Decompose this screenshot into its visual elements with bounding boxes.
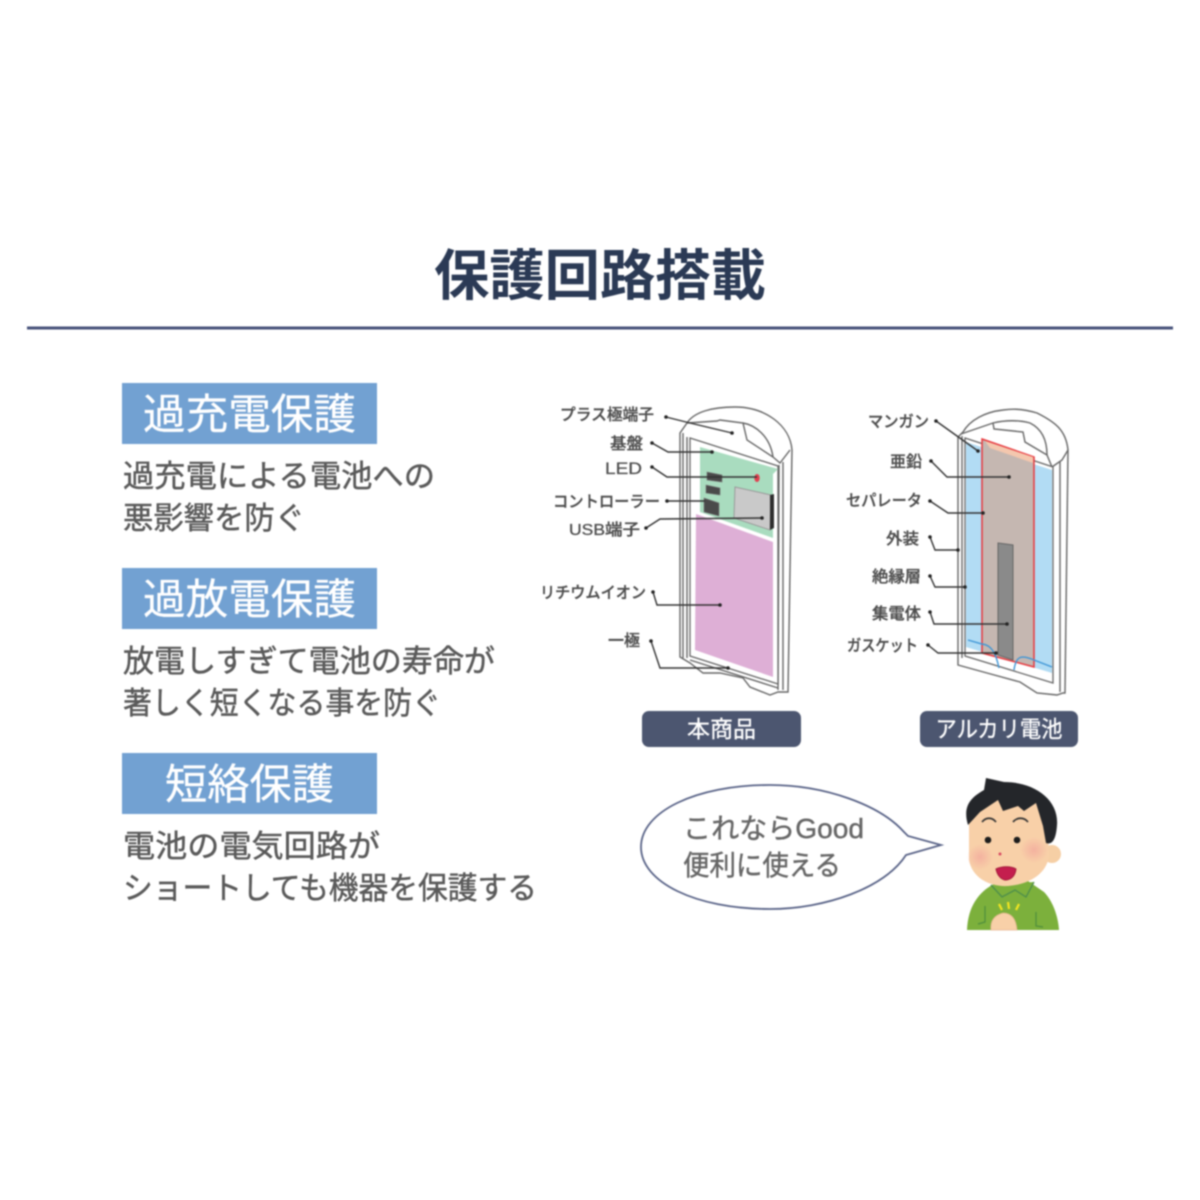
character: happy man — [966, 778, 1061, 930]
text: over-discharge description — [123, 644, 495, 721]
heading: over-discharge: 過放電保護 — [143, 576, 356, 623]
blue electrolyte layer — [966, 442, 1052, 673]
text: over-discharge description: 放電しすぎて電池の寿命が — [123, 644, 495, 679]
heading: short-circuit: 短絡保護 — [165, 761, 334, 808]
brows — [982, 818, 1028, 822]
callout labels: コントローラー — [553, 494, 660, 511]
callout lines — [644, 415, 764, 670]
ear — [1043, 845, 1061, 863]
bubble text: これならGood — [683, 813, 864, 844]
section: overcharge protection — [122, 383, 435, 536]
hair — [966, 778, 1057, 843]
battery casing — [958, 409, 1068, 695]
callout labels: 絶縁層 — [872, 568, 921, 586]
callout labels: セパレータ — [846, 492, 922, 510]
bubble text — [683, 813, 864, 881]
callout labels: プラス極端子 — [560, 406, 654, 424]
manganese top strip — [985, 441, 1033, 463]
nose — [998, 852, 1002, 856]
callout labels — [846, 413, 929, 655]
title divider — [27, 326, 1173, 330]
green circuit board — [700, 447, 778, 538]
badge: alkaline battery — [920, 711, 1078, 747]
callout labels: ガスケット — [847, 637, 918, 655]
heading: over-discharge — [122, 568, 377, 629]
section: short-circuit protection — [122, 753, 537, 906]
speech bubble — [641, 785, 941, 909]
text: short-circuit description: 電池の電気回路が — [123, 829, 380, 864]
heading: short-circuit — [122, 753, 377, 814]
badge: this product: 本商品 — [687, 716, 756, 742]
section: over-discharge protection — [122, 568, 495, 721]
hands — [991, 913, 1017, 930]
heading: overcharge: 過充電保護 — [143, 391, 356, 438]
callout labels: 亜鉛 — [890, 453, 922, 471]
text: overcharge description — [123, 459, 435, 536]
sparkle — [999, 902, 1019, 910]
face — [969, 794, 1049, 886]
battery casing — [680, 407, 792, 695]
text: overcharge description: 過充電による電池への — [123, 459, 435, 494]
title: 保護回路搭載 — [434, 245, 766, 307]
callout labels: 基盤 — [610, 435, 643, 453]
diagram: alkaline battery — [846, 409, 1078, 747]
callout labels: リチウムイオン — [540, 584, 646, 602]
controller chips — [704, 472, 722, 516]
callout labels: 一極 — [608, 632, 640, 650]
bubble text: 便利に使える — [683, 850, 841, 881]
USB terminal — [734, 487, 774, 530]
cheeks — [967, 844, 993, 870]
text: short-circuit description: ショートしても機器を保護する — [123, 871, 537, 906]
eyes — [985, 837, 991, 843]
badge: alkaline battery: アルカリ電池 — [936, 716, 1062, 742]
callout labels: LED — [605, 459, 642, 478]
zinc core — [982, 439, 1034, 667]
text: over-discharge description: 著しく短くなる事を防ぐ — [123, 686, 441, 721]
callout labels — [540, 406, 660, 650]
text: overcharge description: 悪影響を防ぐ — [123, 501, 305, 536]
callout labels: 集電体 — [872, 605, 921, 623]
collar — [991, 882, 1034, 897]
sweater — [967, 881, 1059, 930]
sleeve lines — [978, 906, 1043, 927]
gasket wave — [968, 640, 1052, 670]
heading: overcharge — [122, 383, 377, 444]
pink lithium-ion cell — [695, 514, 773, 677]
text: short-circuit description — [123, 829, 537, 906]
collector rod — [998, 543, 1013, 660]
callout labels: USB端子 — [569, 521, 640, 539]
badge: this product — [642, 711, 801, 747]
callout lines — [926, 419, 1011, 655]
diagram: product battery — [540, 406, 801, 747]
mouth — [996, 867, 1016, 880]
LED — [754, 474, 760, 482]
callout labels: マンガン — [868, 413, 929, 431]
callout labels: 外装 — [886, 530, 919, 548]
